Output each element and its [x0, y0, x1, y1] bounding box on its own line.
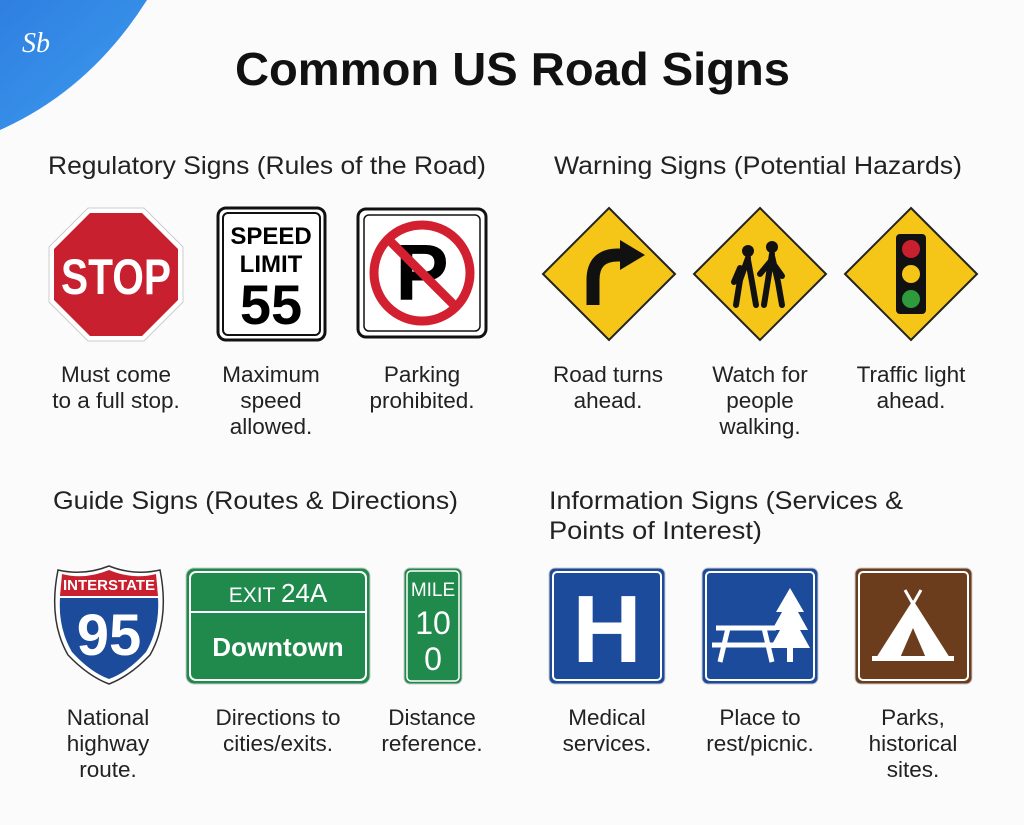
captions row 2: route.: [79, 757, 137, 782]
sign: mile marker: 0: [424, 641, 442, 677]
captions row 1: prohibited.: [369, 388, 475, 413]
sign: speed limit: 55: [240, 273, 302, 336]
sign: hospital: [549, 568, 665, 684]
sign: stop: STOP: [61, 249, 171, 305]
captions row 2: Medical: [568, 705, 646, 730]
sign: speed limit: LIMIT: [240, 251, 303, 278]
captions row 1: speed: [240, 388, 302, 413]
sign: interstate: INTERSTATE: [63, 577, 155, 594]
sign: exit: Downtown: [212, 632, 344, 662]
captions row 2: cities/exits.: [223, 731, 333, 756]
captions row 2: rest/picnic.: [706, 731, 814, 756]
captions row 1: Maximum: [222, 362, 320, 387]
captions row 1: Traffic light: [857, 362, 966, 387]
captions row 1: Road turns: [553, 362, 663, 387]
corner logo: Sb: [22, 28, 50, 59]
captions row 2: Place to: [719, 705, 801, 730]
captions row 2: Directions to: [215, 705, 341, 730]
captions row 2: sites.: [887, 757, 939, 782]
captions row 1: people: [726, 388, 794, 413]
captions row 1: ahead.: [877, 388, 945, 413]
captions row 2: [67, 705, 957, 782]
sign: no parking: [358, 209, 486, 337]
sign: mile marker: [404, 568, 462, 684]
sign: speed limit: [218, 208, 325, 340]
sign: campground: [855, 568, 972, 684]
captions row 1: to a full stop.: [52, 388, 180, 413]
heading: guide: Guide Signs (Routes & Directions): [53, 487, 458, 515]
captions row 2: reference.: [381, 731, 483, 756]
captions row 2: historical: [869, 731, 957, 756]
sign: mile marker: 10: [415, 605, 451, 641]
heading: information: Information Signs (Services &: [549, 487, 903, 515]
sign: pedestrians: [694, 208, 826, 340]
sign: interstate: [55, 566, 163, 684]
captions row 1: allowed.: [230, 414, 312, 439]
sign: exit: [186, 568, 370, 684]
captions row 1: walking.: [718, 414, 801, 439]
heading: regulatory: Regulatory Signs (Rules of the Road): [48, 152, 486, 180]
captions row 1: Watch for: [712, 362, 808, 387]
captions row 1: [52, 362, 966, 439]
sign: traffic light: [845, 208, 977, 340]
captions row 1: Parking: [384, 362, 460, 387]
captions row 2: Parks,: [881, 705, 945, 730]
sign: speed limit: SPEED: [230, 223, 312, 250]
sign: picnic: [702, 568, 818, 684]
sign: road turns: [543, 208, 675, 340]
sign: hospital: H: [572, 576, 642, 683]
heading: information: Points of Interest): [549, 517, 762, 545]
sign: stop: [49, 208, 183, 341]
captions row 2: National: [67, 705, 149, 730]
title: Common US Road Signs: [235, 43, 790, 95]
sign: interstate: 95: [77, 603, 141, 668]
sign: mile marker: MILE: [411, 580, 455, 601]
captions row 1: ahead.: [574, 388, 642, 413]
sign: no parking: P: [395, 228, 449, 317]
sign: exit: EXIT 24A: [229, 578, 328, 608]
heading: warning: Warning Signs (Potential Hazards): [554, 152, 962, 180]
captions row 1: Must come: [61, 362, 171, 387]
captions row 2: services.: [563, 731, 651, 756]
corner logo: [0, 0, 147, 130]
captions row 2: highway: [67, 731, 150, 756]
captions row 2: Distance: [388, 705, 476, 730]
